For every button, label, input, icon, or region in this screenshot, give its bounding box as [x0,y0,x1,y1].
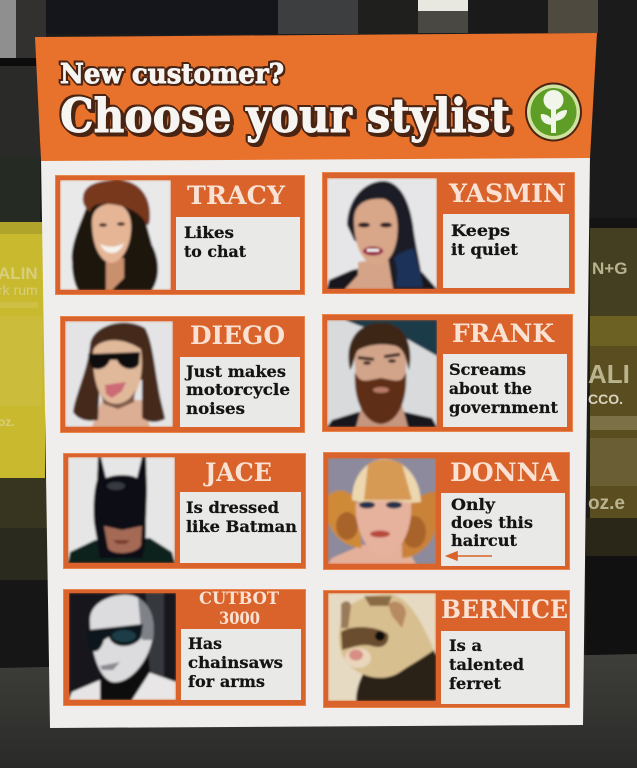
header banner [35,33,597,161]
heading: Choose your stylist: Choose your stylist [60,89,510,144]
description: Likes to chat: to chat [184,242,247,261]
description: Screams about the government [449,360,559,417]
description: Has chainsaws for arms: Has [188,634,222,653]
description: Is dressed like Batman: like Batman [186,517,297,536]
description: Is a talented ferret: ferret [449,674,502,693]
description: Is dressed like Batman [186,498,297,536]
photo: Donna [328,458,436,564]
panel: Tracy [55,175,305,295]
description: Just makes motorcycle noises [184,362,290,418]
description: Only does this haircut: Only [451,495,496,514]
photo: Frank [327,320,437,427]
description: Screams about the government: Screams [449,360,526,379]
description: Keeps it quiet: it quiet [451,240,519,259]
description: Only does this haircut: haircut [451,531,518,550]
description: Just makes motorcycle noises: motorcycle [186,380,290,399]
description box [443,354,567,427]
description box [181,629,301,700]
description: Has chainsaws for arms: chainsaws [188,653,283,672]
background: shelves behind the sign: ALI [588,359,630,389]
panel: Frank [322,314,573,432]
name: JACE: JACE [203,458,272,487]
sign board [41,155,590,728]
description: Just makes motorcycle noises: noises [186,399,245,418]
background: shelves behind the sign: N+G [592,259,627,278]
description: Only does this haircut: does this [451,513,533,532]
background: shelves behind the sign: CCO. [588,391,623,407]
description: Is a talented ferret: talented [449,655,524,674]
description: Keeps it quiet [451,221,519,259]
photo: Yasmin [327,178,437,289]
description box [180,357,300,427]
description: Screams about the government: about the [449,379,532,398]
description: Is a talented ferret: Is a [449,636,482,655]
description box [441,631,565,704]
description box [180,492,301,563]
description: Likes to chat [184,223,247,261]
name: CUTBOT 3000 [199,589,279,629]
panel: Yasmin [322,172,575,294]
background: shelves behind the sign: oz.e [588,493,625,514]
name: BERNICE: BERNICE [441,595,568,624]
name: CUTBOT 3000: CUTBOT [199,589,279,609]
panel: Cutbot 3000 [63,589,306,706]
panel: Diego [60,316,305,433]
description: Keeps it quiet: Keeps [451,221,510,240]
panel: Bernice [323,590,570,708]
description box [441,493,565,566]
description box [176,217,300,290]
heading: New customer?: New customer? [60,59,284,90]
description: Has chainsaws for arms [188,634,283,691]
photo: Diego [65,321,173,427]
description: Has chainsaws for arms: for arms [188,672,265,691]
name: DIEGO: DIEGO [190,321,285,350]
icon: green flower logo [525,82,582,142]
photo: Tracy [60,180,171,290]
description: Is dressed like Batman: Is dressed [186,498,279,517]
panel: Jace [63,453,306,569]
description: Likes to chat: Likes [184,223,234,242]
panel: Donna [323,452,570,570]
description: Just makes motorcycle noises: Just makes [184,362,286,381]
photo: Cutbot robot [69,593,176,700]
arrow pointing to the haircut photo [447,552,492,560]
photo: Jace as Batman [68,457,175,563]
name: TRACY: TRACY [187,181,286,210]
description: Only does this haircut [451,495,533,550]
name: CUTBOT 3000: 3000 [219,609,260,629]
name: YASMIN: YASMIN [448,179,566,208]
name: FRANK: FRANK [452,319,555,348]
description: Is a talented ferret [449,636,524,693]
description box [443,214,569,288]
photo: Bernice the ferret [328,593,436,701]
name: DONNA: DONNA [450,458,560,487]
description: Screams about the government: government [449,398,559,417]
